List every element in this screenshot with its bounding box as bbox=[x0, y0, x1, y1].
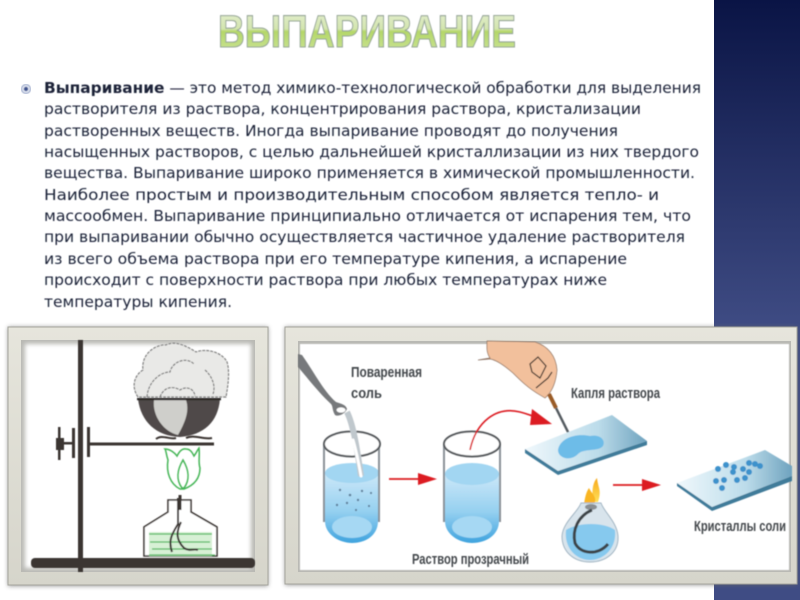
label: salt: соль bbox=[351, 386, 382, 402]
text block: definition: Наиболее простым и производительным способом является тепло- и bbox=[44, 186, 659, 204]
icon: alcohol burner bbox=[562, 478, 618, 562]
slide with salt crystals bbox=[677, 450, 792, 511]
arrow: salt to clear solution bbox=[389, 473, 437, 485]
text block: definition: растворителя из раствора, концентрирования раствора, кристализации bbox=[44, 100, 641, 118]
spirit lamp bbox=[144, 495, 217, 556]
title: ВЫПАРИВАНИЕ bbox=[218, 6, 516, 57]
text block: definition: температуры кипения. bbox=[44, 293, 232, 311]
arrow: burner to crystals bbox=[613, 479, 661, 491]
glass with clear solution bbox=[443, 432, 501, 543]
panel: salt solution experiment bbox=[285, 327, 797, 585]
panel: spirit-lamp evaporation apparatus bbox=[8, 327, 268, 586]
slide with drop bbox=[525, 415, 647, 475]
label: clear solution: Раствор прозрачный bbox=[412, 552, 529, 568]
evaporating dish bbox=[137, 398, 221, 439]
label: drop: Капля раствора bbox=[571, 386, 661, 402]
text block: definition: из всего объема раствора при его температуре кипения, а испарение bbox=[44, 250, 627, 268]
text block: definition: происходит с поверхности раствора при любых температурах ниже bbox=[44, 271, 607, 289]
steam cloud bbox=[134, 343, 229, 397]
glass with salt bbox=[323, 432, 380, 543]
label: salt bbox=[351, 365, 422, 402]
arrow: curved to glass slide bbox=[470, 409, 552, 450]
green flame bbox=[165, 448, 200, 489]
text block: definition: Выпаривание — это метод химико-технологической обработки для выделения bbox=[44, 79, 701, 97]
text block: definition: массообмен. Выпаривание принципиально отличается от испарения тем, что bbox=[44, 207, 691, 225]
text block: definition: при выпаривании обычно осуществляется частичное удаление растворителя bbox=[44, 228, 685, 246]
background panel: navy side band bbox=[714, 0, 800, 600]
text block: definition: растворенных веществ. Иногда выпаривание проводят до получения bbox=[44, 122, 618, 140]
label: salt: Поваренная bbox=[351, 365, 422, 381]
text block: definition bbox=[44, 79, 701, 311]
stand rod and base bbox=[31, 340, 255, 572]
text block: definition: вещества. Выпаривание широко применяется в химической промышленности. bbox=[44, 164, 695, 182]
icon: hand with pipette bbox=[478, 341, 570, 436]
clamp and ring bbox=[56, 427, 214, 460]
icon: spoon with falling salt bbox=[298, 354, 361, 476]
icon: bullet bbox=[22, 84, 30, 94]
text block: definition: насыщенных растворов, с целью дальнейшей кристаллизации из них твердого bbox=[44, 143, 699, 161]
apparatus drawing bbox=[31, 340, 255, 572]
